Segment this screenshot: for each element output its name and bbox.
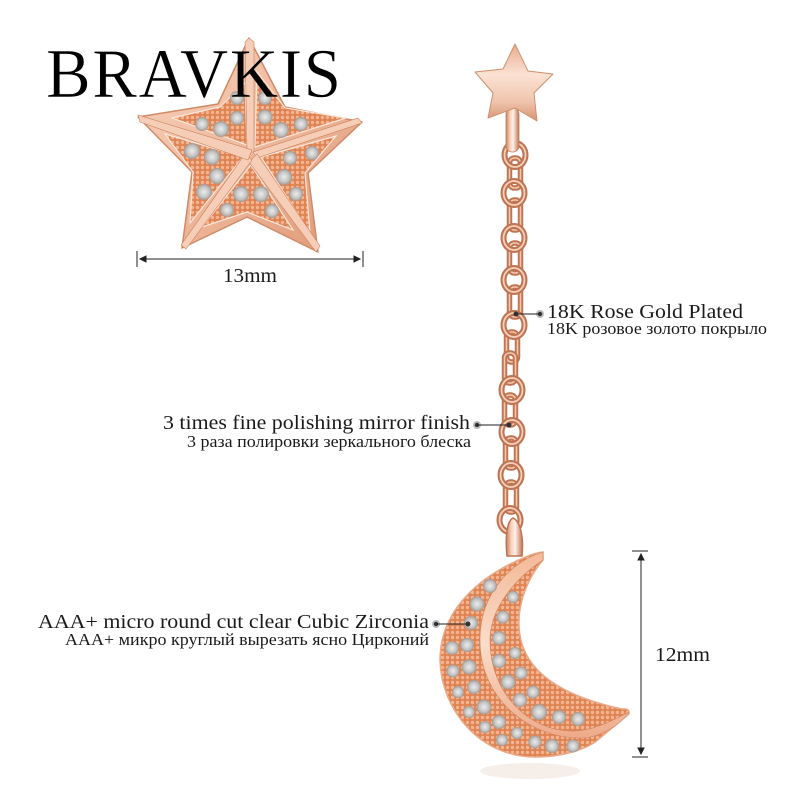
- moon gems: [445, 579, 585, 753]
- height label: 12mm: [655, 644, 710, 666]
- narrow chain links: [504, 158, 520, 512]
- hook: [506, 108, 519, 152]
- star gems: [184, 91, 319, 218]
- width arrow: [137, 251, 363, 267]
- width label: 13mm: [223, 265, 277, 287]
- width dimension: 13mm: [137, 251, 363, 287]
- top small star with hook: [475, 44, 553, 152]
- russian label: 3 раза полировки зеркального блеска: [187, 432, 472, 451]
- pointer: [473, 421, 512, 429]
- moon reflection: [480, 763, 580, 779]
- small star: [475, 44, 553, 121]
- russian label: 18K розовое золото покрыло: [547, 319, 767, 338]
- star body: [138, 38, 362, 252]
- callout: cubic zirconia: [38, 611, 470, 649]
- star ridges: [138, 38, 362, 252]
- round chain rings: [500, 143, 526, 532]
- crescent body: [440, 552, 629, 757]
- pave facets: [165, 72, 346, 233]
- pointer: [514, 310, 544, 318]
- russian label: AAA+ микро круглый вырезать ясно Цирконий: [65, 630, 429, 649]
- moon pendant: [440, 552, 629, 757]
- chain: [500, 143, 526, 532]
- logo: BRAVKIS: BRAVKIS: [46, 35, 341, 112]
- english label: AAA+ micro round cut clear Cubic Zirconia: [38, 611, 429, 633]
- height arrow: [632, 551, 648, 757]
- callout: mirror finish: [163, 412, 512, 451]
- height dimension: 12mm: [632, 551, 710, 757]
- star earring stud: [138, 38, 362, 252]
- english label: 18K Rose Gold Plated: [547, 301, 743, 323]
- english label: 3 times fine polishing mirror finish: [163, 412, 470, 434]
- crescent ridge: [480, 552, 629, 738]
- pointer: [432, 620, 470, 628]
- moon bail: [506, 518, 523, 556]
- callout: rose gold plating: [514, 301, 767, 338]
